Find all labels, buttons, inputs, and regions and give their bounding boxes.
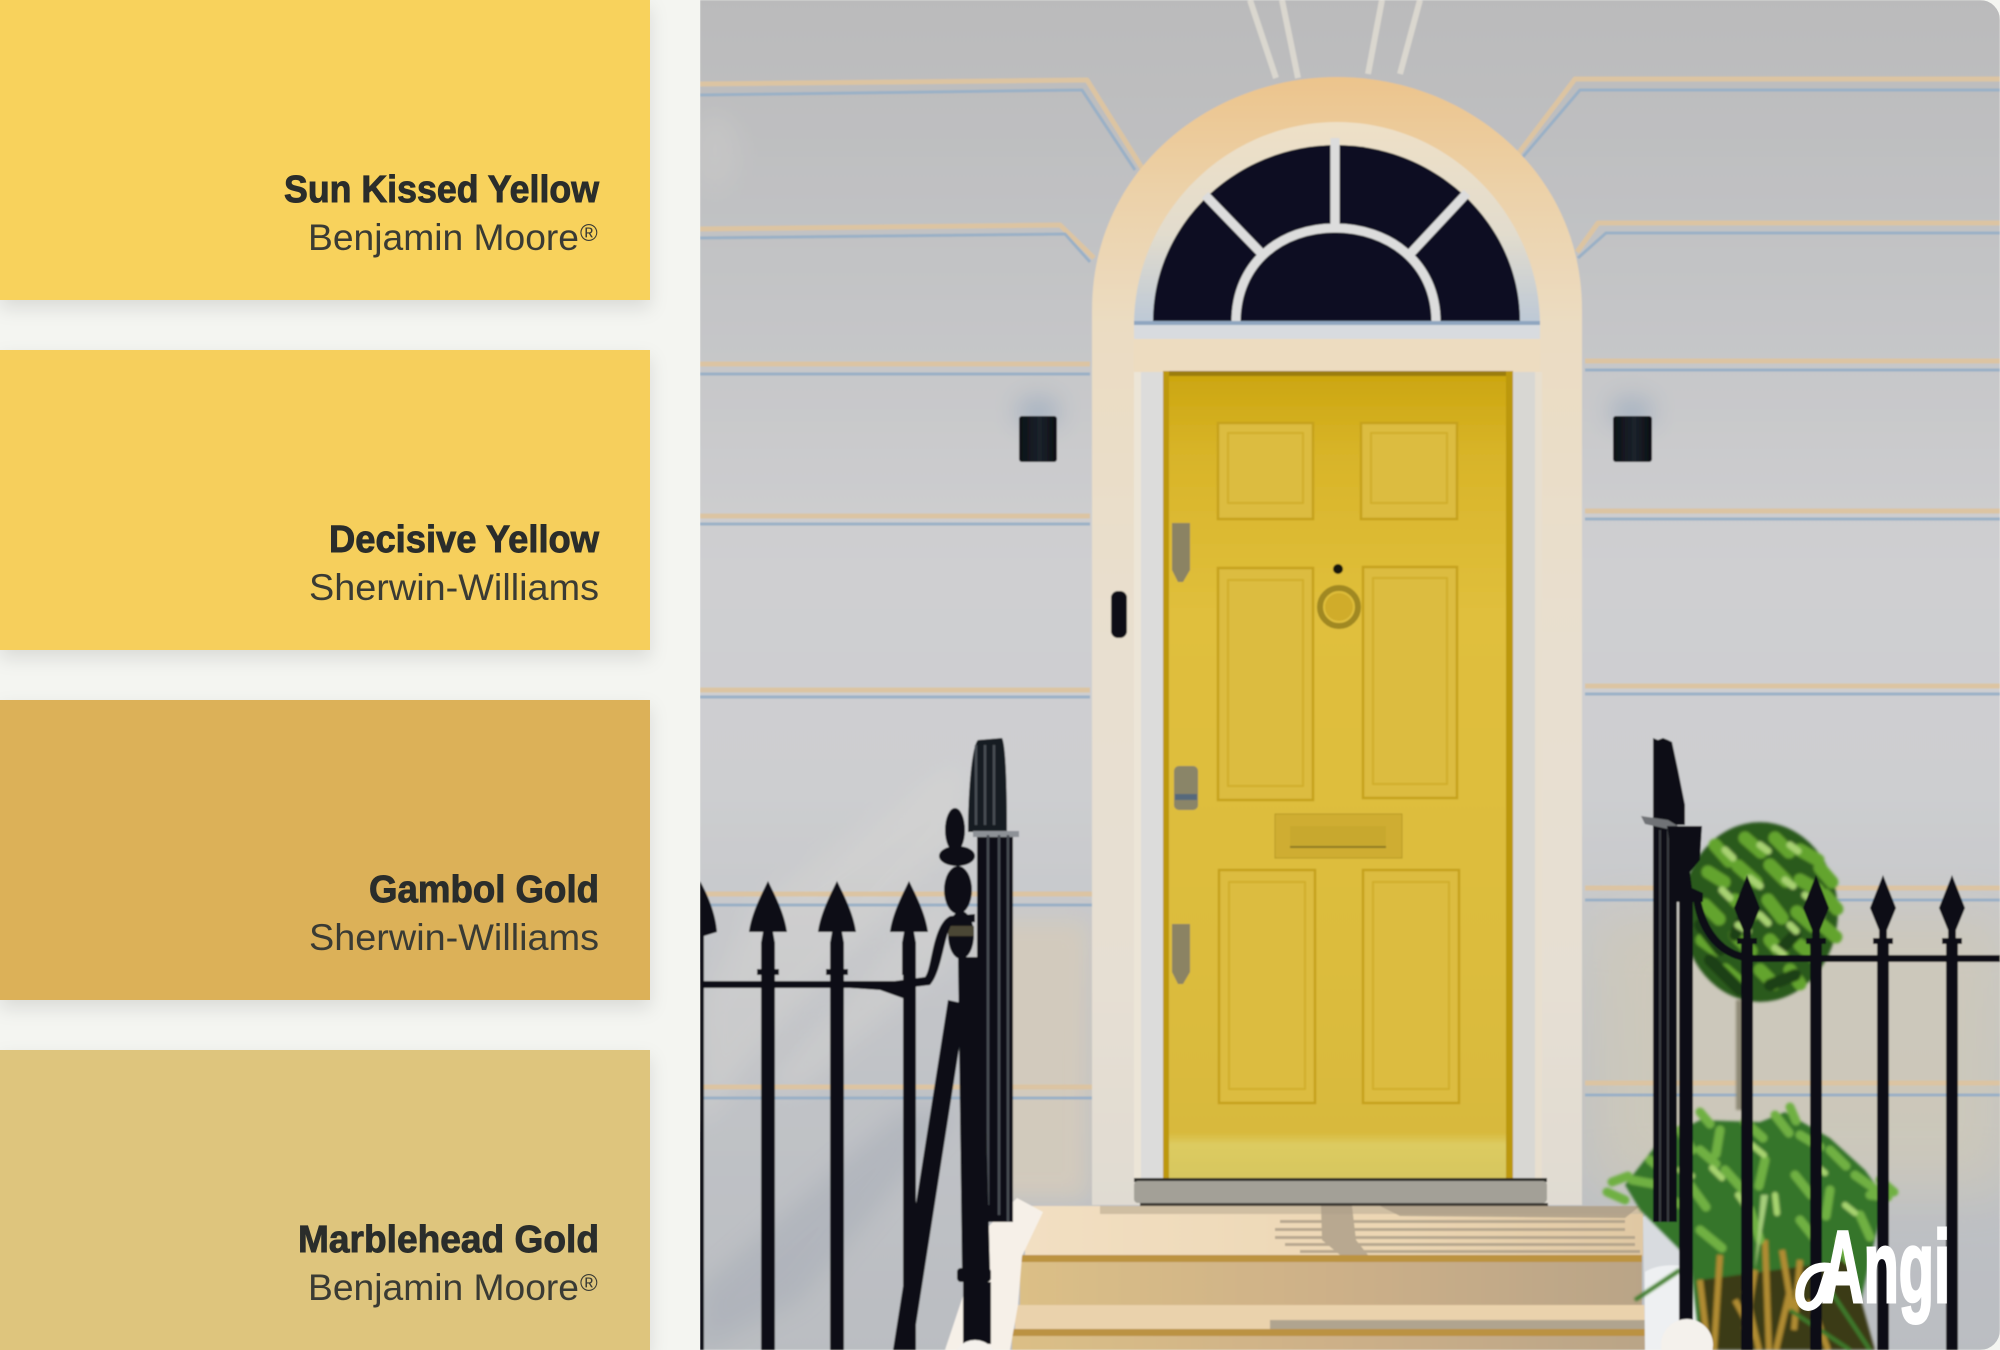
panel: swatch Marblehead Gold: Benjamin Moore — [308, 1267, 579, 1308]
door panels — [1218, 423, 1459, 1103]
door threshold — [1134, 1178, 1548, 1206]
left white plinth — [945, 1198, 1043, 1350]
left post base — [962, 1338, 988, 1345]
arched window — [1134, 122, 1540, 325]
crossbar and bracket — [700, 914, 975, 1000]
main newel post and urn — [1667, 826, 1703, 1323]
door frame jambs — [1134, 372, 1542, 1182]
panel: swatch Gambol Gold: Sherwin-Williams — [309, 917, 599, 958]
spear bars — [700, 881, 928, 1350]
panel: swatch Marblehead Gold: Marblehead Gold — [298, 1219, 599, 1261]
right plant lower — [1607, 1107, 1894, 1350]
panel: swatch Decisive Yellow: Decisive Yellow — [329, 519, 599, 561]
Angi logo — [1795, 1226, 1947, 1325]
right railing — [1641, 738, 2000, 1350]
stucco band lines — [700, 79, 2000, 1098]
panel: swatch Gambol Gold — [0, 700, 650, 1000]
spear bars — [1734, 875, 1965, 1350]
stone steps — [1012, 1206, 1648, 1350]
left railing — [700, 738, 1019, 1350]
panel: photo of house with yellow door — [690, 0, 2000, 1350]
arched door surround — [1092, 77, 1582, 1205]
doorbell — [1111, 591, 1127, 638]
panel: swatch Sun Kissed Yellow: ® — [580, 220, 598, 247]
panel: swatch Sun Kissed Yellow: Benjamin Moore — [308, 217, 579, 258]
yellow door — [1163, 371, 1513, 1181]
wall lamps — [1016, 398, 1654, 462]
lock hardware — [1172, 523, 1198, 984]
plinth finial — [1678, 1318, 1714, 1350]
panel: swatch Decisive Yellow: Sherwin-Williams — [309, 567, 599, 608]
crossbar with curve — [1693, 895, 2000, 962]
stucco wall — [690, 0, 2000, 1350]
door knocker — [1320, 564, 1358, 626]
gate stay — [893, 1000, 966, 1350]
right white plinth — [1642, 1216, 1698, 1350]
rear bars cluster — [1641, 738, 1685, 1222]
panel: swatch Marblehead Gold: ® — [580, 1270, 598, 1297]
window glass — [1153, 145, 1520, 321]
panel: swatch Sun Kissed Yellow: Sun Kissed Yellow — [284, 169, 599, 211]
lintel — [1134, 320, 1540, 340]
photo scene — [690, 0, 2000, 1350]
panel: swatch Decisive Yellow — [0, 350, 650, 650]
main newel post with finial — [939, 808, 991, 1344]
panel: swatch Marblehead Gold — [0, 1050, 650, 1350]
window mullions — [1205, 138, 1467, 322]
step shadows — [1275, 1206, 1640, 1255]
right bay tree — [1682, 822, 1838, 1110]
rear bars cluster — [968, 738, 1019, 1222]
keystone lines — [1250, 0, 1420, 78]
letter plate — [1275, 814, 1402, 858]
panel: swatch Gambol Gold: Gambol Gold — [369, 869, 599, 911]
panel: swatch Sun Kissed Yellow — [0, 0, 650, 300]
